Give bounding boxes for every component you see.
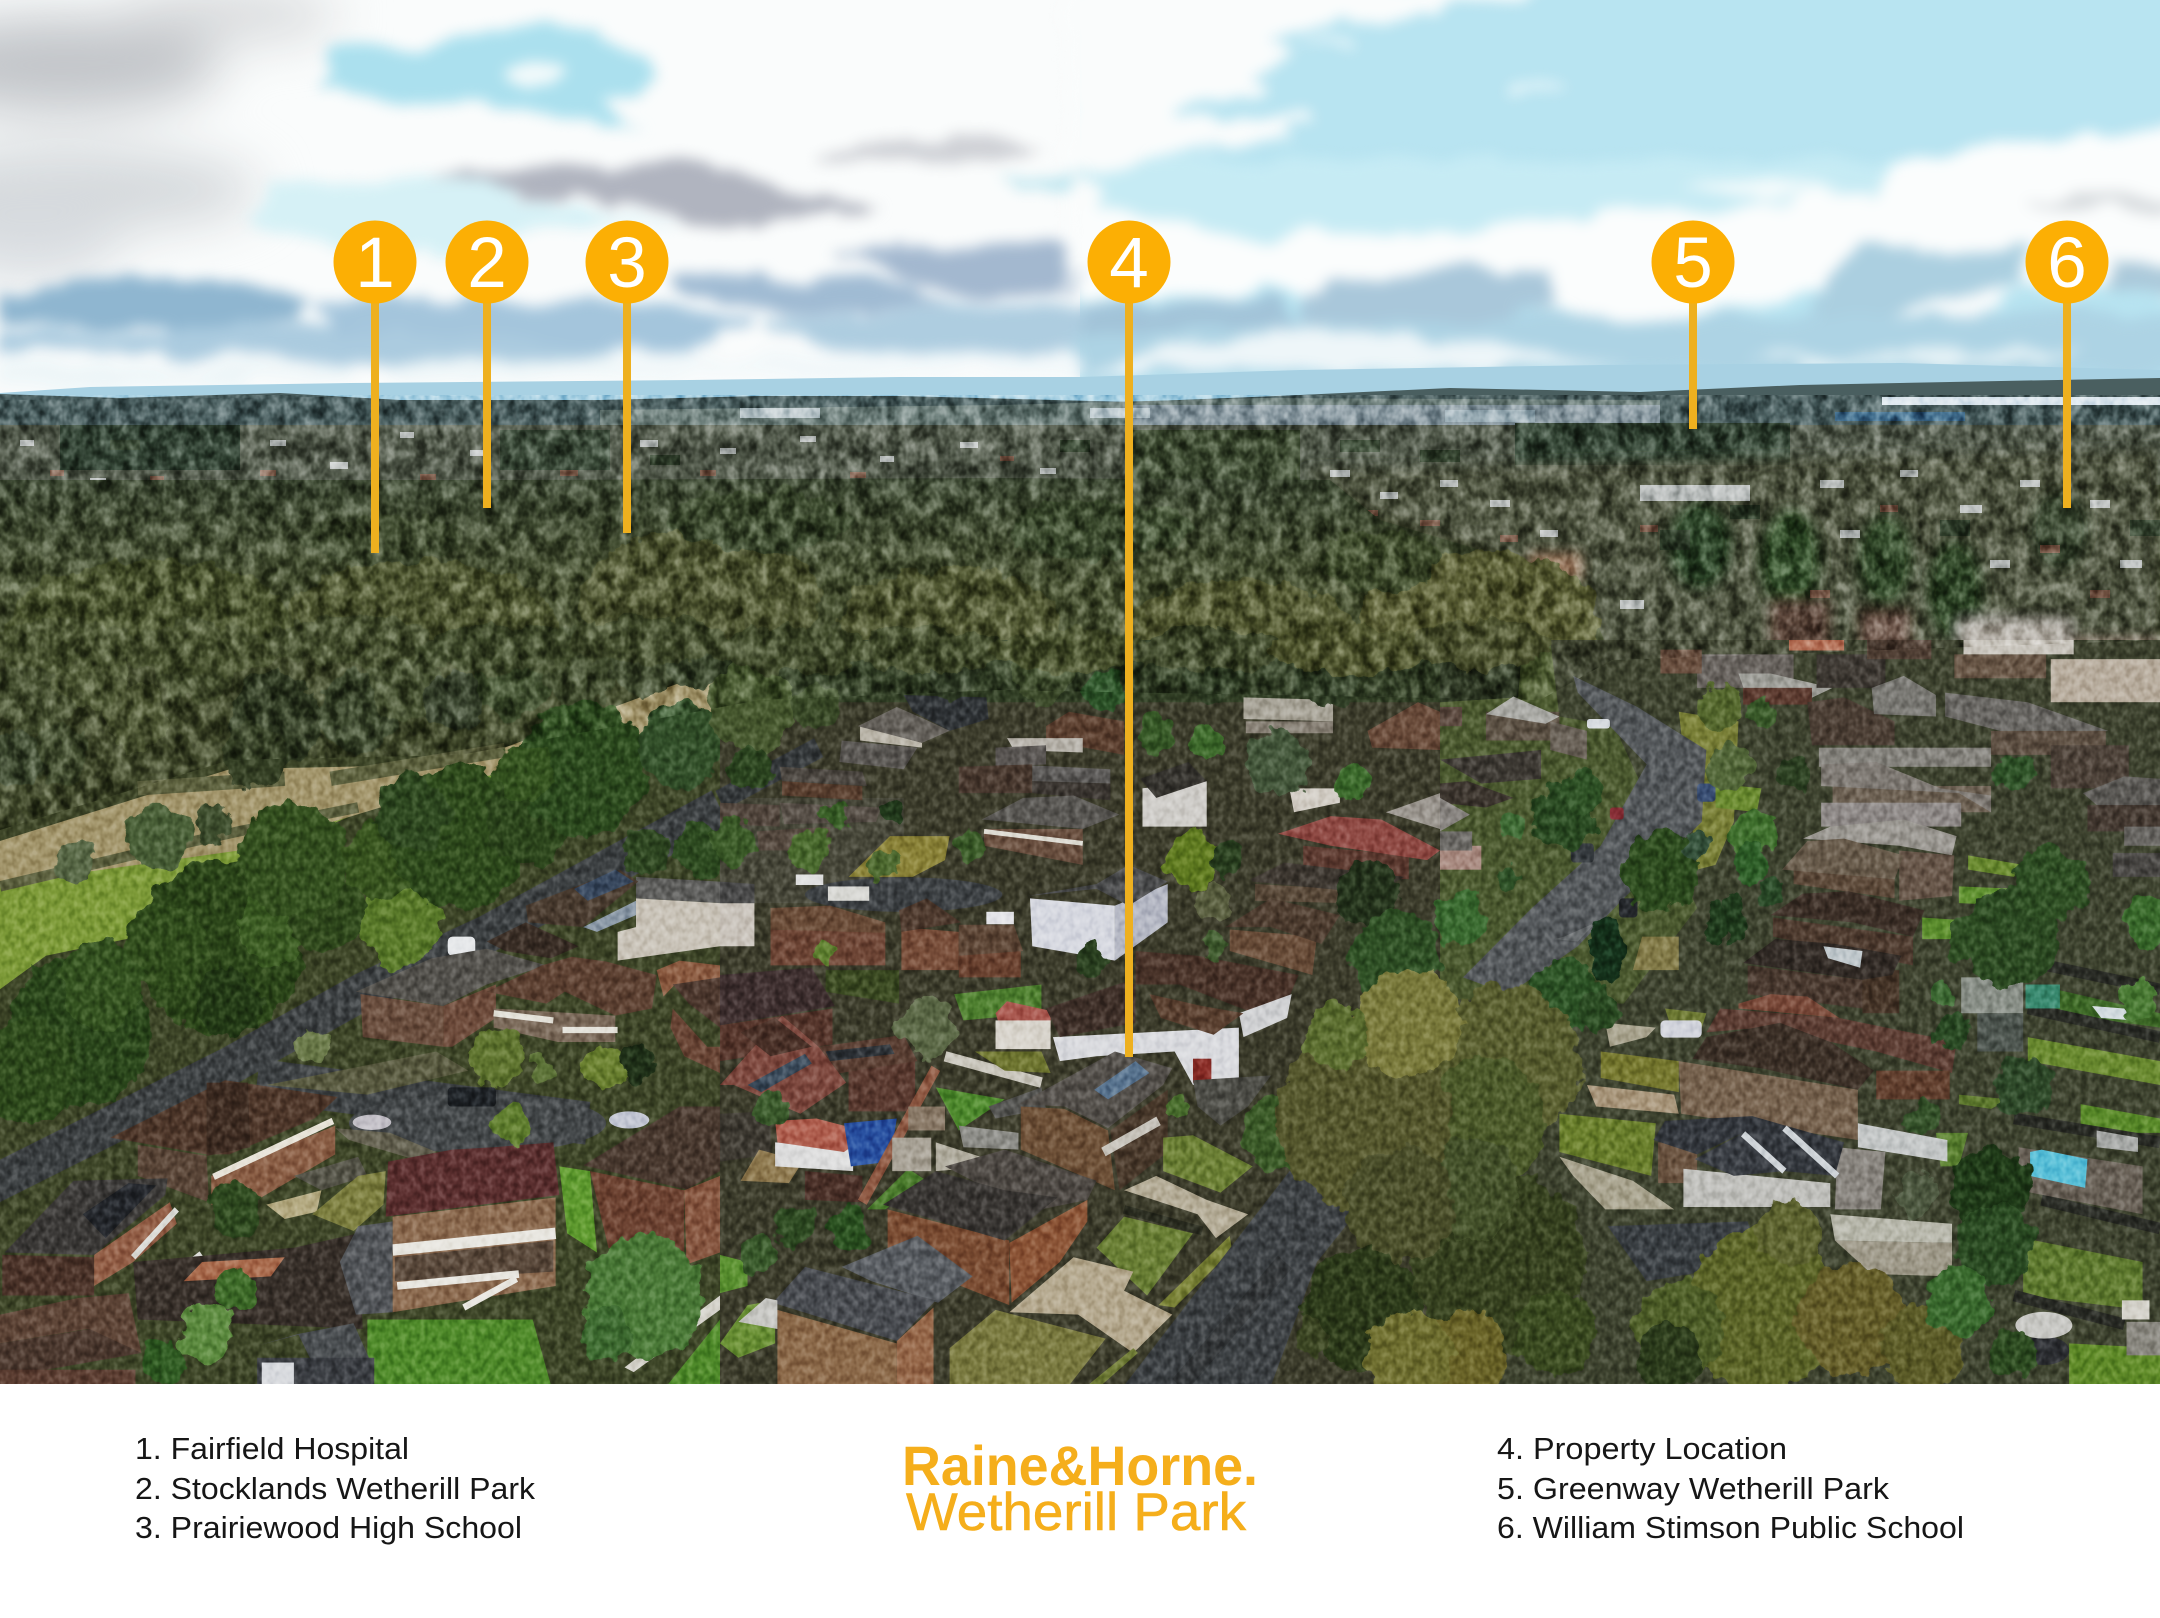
- legend: left column: [135, 1431, 536, 1545]
- legend: right column: 5. Greenway Wetherill Park: [1497, 1471, 1890, 1506]
- houses: left section: [0, 870, 720, 1386]
- fine grain texture: [0, 395, 2160, 1384]
- trees: left section: [0, 616, 730, 1123]
- sky and clouds: [0, 0, 2160, 387]
- legend: right column: 4. Property Location: [1497, 1431, 1787, 1466]
- pin 3: 3: [607, 224, 647, 303]
- legend: right column: [1497, 1431, 1964, 1545]
- suburb right of forest: [1320, 453, 2160, 640]
- cul-de-sac houses: centre section: [720, 640, 1440, 1386]
- trees: right section: [1412, 684, 2160, 1403]
- legend: left column: 2. Stocklands Wetherill Park: [135, 1471, 536, 1506]
- legend: left column: 1. Fairfield Hospital: [135, 1431, 409, 1466]
- pin 1: 1: [355, 224, 395, 303]
- pin 2: [446, 220, 528, 508]
- logo: Raine & Horne Wetherill Park: Wetherill Park: [906, 1483, 1247, 1542]
- far suburbs and ridge: [0, 378, 2160, 640]
- sky base: [1080, 0, 2160, 377]
- pin 5: 5: [1673, 224, 1713, 303]
- pin 4: 4: [1109, 224, 1149, 303]
- soft grey cloud shading: [0, 0, 340, 280]
- pin 6: 6: [2047, 224, 2087, 303]
- logo: Raine & Horne Wetherill Park: Raine&Horne.: [902, 1434, 1258, 1497]
- forest edge crowns: [0, 614, 1550, 674]
- forest crown texture: [0, 395, 2160, 855]
- eucalyptus forest: [0, 478, 1604, 640]
- trees: centre section: [709, 630, 1462, 1403]
- logo: Raine & Horne Wetherill Park: [902, 1434, 1258, 1542]
- pin 4: [1088, 220, 1170, 1057]
- distant suburb roofs: [20, 432, 2160, 609]
- pin 5: [1652, 220, 1734, 429]
- pin 3: [586, 220, 668, 533]
- pin 6: [2026, 220, 2108, 508]
- legend: right column: 6. William Stimson Public School: [1497, 1510, 1964, 1545]
- legend: left column: 3. Prairiewood High School: [135, 1510, 522, 1545]
- park, road and houses: left section: [0, 640, 720, 1202]
- pin 2: 2: [467, 224, 507, 303]
- pin 1: [334, 220, 416, 553]
- distant hills: [0, 363, 2160, 402]
- small garden trees: left section: [143, 1027, 703, 1386]
- street, houses and backyards: right section: [1440, 640, 2160, 1386]
